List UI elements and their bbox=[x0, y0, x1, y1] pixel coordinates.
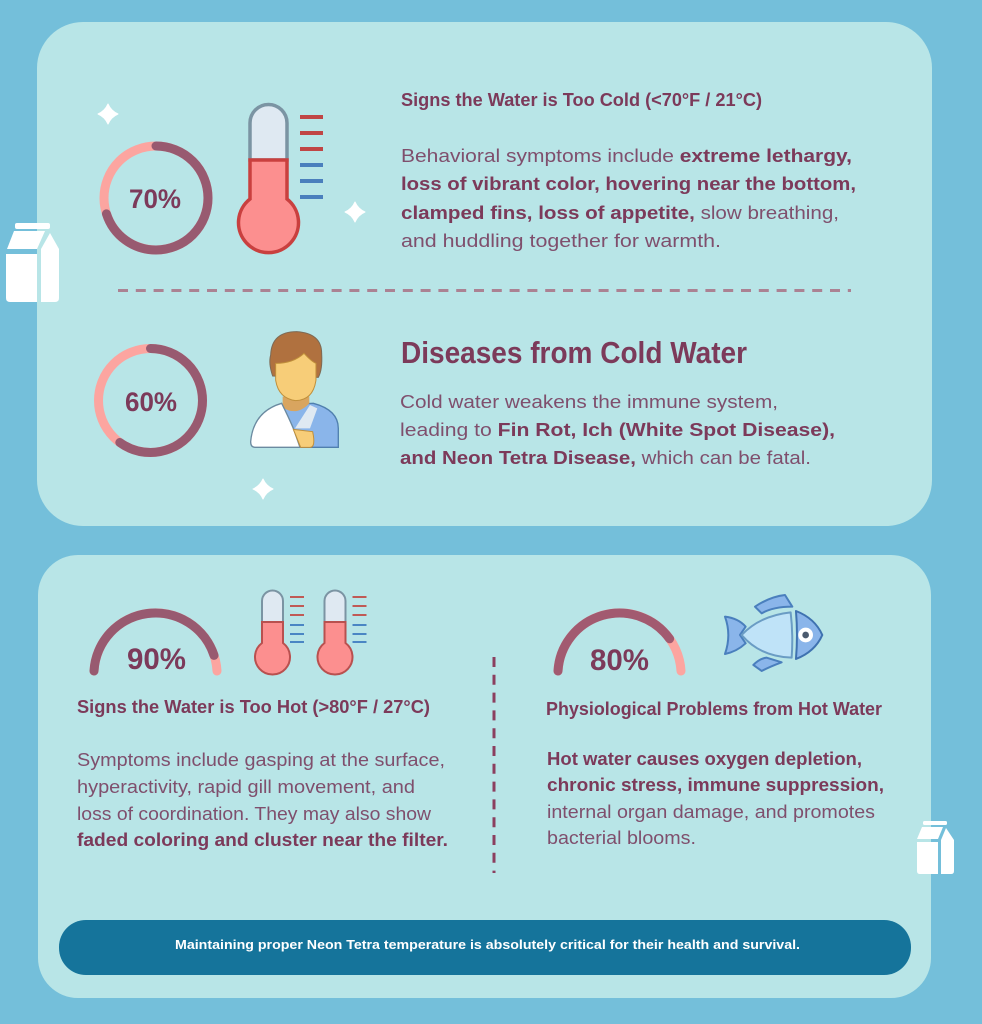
heading: diseases from cold water: Diseases from Cold Water bbox=[401, 335, 747, 370]
text: physiological body bbox=[547, 749, 884, 848]
chart: 70% ring bbox=[104, 146, 208, 250]
text: cold symptoms: Behavioral symptoms include extreme lethargy, bbox=[401, 146, 852, 166]
chart: 90% gauge: 90% bbox=[127, 643, 186, 676]
icon: large thermometer bbox=[239, 104, 323, 253]
chart: 90% gauge bbox=[94, 613, 217, 676]
icon: milk carton left bbox=[6, 223, 59, 302]
text: hot symptoms bbox=[77, 750, 448, 850]
icon: milk carton right bbox=[917, 821, 954, 874]
chart: 60% ring: 60% bbox=[125, 387, 177, 417]
chart: 70% ring: 70% bbox=[129, 184, 181, 214]
text: physiological body: bacterial blooms. bbox=[547, 828, 696, 848]
heading: too hot: Signs the Water is Too Hot (>80°F / 27°C) bbox=[77, 696, 430, 717]
icon: thermometer two bbox=[318, 590, 366, 674]
panel: too cold and diseases bbox=[37, 22, 932, 526]
text: diseases body bbox=[400, 392, 835, 468]
text: diseases body: leading to Fin Rot, Ich (White Spot Disease), bbox=[400, 420, 835, 440]
text: hot symptoms: hyperactivity, rapid gill movement, and bbox=[77, 777, 415, 797]
heading: physiological problems: Physiological Problems from Hot Water bbox=[546, 698, 882, 719]
banner bbox=[59, 920, 911, 975]
icon: person with arm sling bbox=[251, 332, 338, 447]
text: cold symptoms: loss of vibrant color, hovering near the bottom, bbox=[401, 174, 856, 194]
text: physiological body: internal organ damage, and promotes bbox=[547, 802, 875, 822]
text: hot symptoms: Symptoms include gasping at the surface, bbox=[77, 750, 445, 770]
text: diseases body: Cold water weakens the immune system, bbox=[400, 392, 778, 412]
chart: 80% gauge bbox=[558, 613, 681, 677]
banner: Maintaining proper Neon Tetra temperature is absolutely critical for their health and survival. bbox=[175, 937, 800, 952]
icon: thermometer one bbox=[255, 590, 304, 674]
chart: 80% gauge: 80% bbox=[590, 644, 649, 677]
text: physiological body: chronic stress, immune suppression, bbox=[547, 775, 884, 795]
text: cold symptoms: and huddling together for warmth. bbox=[401, 231, 721, 251]
text: cold symptoms bbox=[401, 146, 856, 251]
text: diseases body: and Neon Tetra Disease, which can be fatal. bbox=[400, 448, 811, 468]
icon: fish bbox=[725, 595, 822, 671]
icon: sparkle right of thermometer bbox=[345, 202, 365, 222]
icon: sparkle top left bbox=[98, 104, 118, 124]
heading: too cold: Signs the Water is Too Cold (<70°F / 21°C) bbox=[401, 89, 762, 110]
text: physiological body: Hot water causes oxygen depletion, bbox=[547, 749, 862, 769]
panel: too hot and physiological problems bbox=[38, 555, 931, 998]
text: hot symptoms: faded coloring and cluster near the filter. bbox=[77, 830, 448, 850]
text: cold symptoms: clamped fins, loss of appetite, slow breathing, bbox=[401, 203, 839, 223]
chart: 60% ring bbox=[98, 348, 202, 452]
text: hot symptoms: loss of coordination. They may also show bbox=[77, 804, 432, 824]
icon: sparkle bottom bbox=[253, 479, 273, 499]
